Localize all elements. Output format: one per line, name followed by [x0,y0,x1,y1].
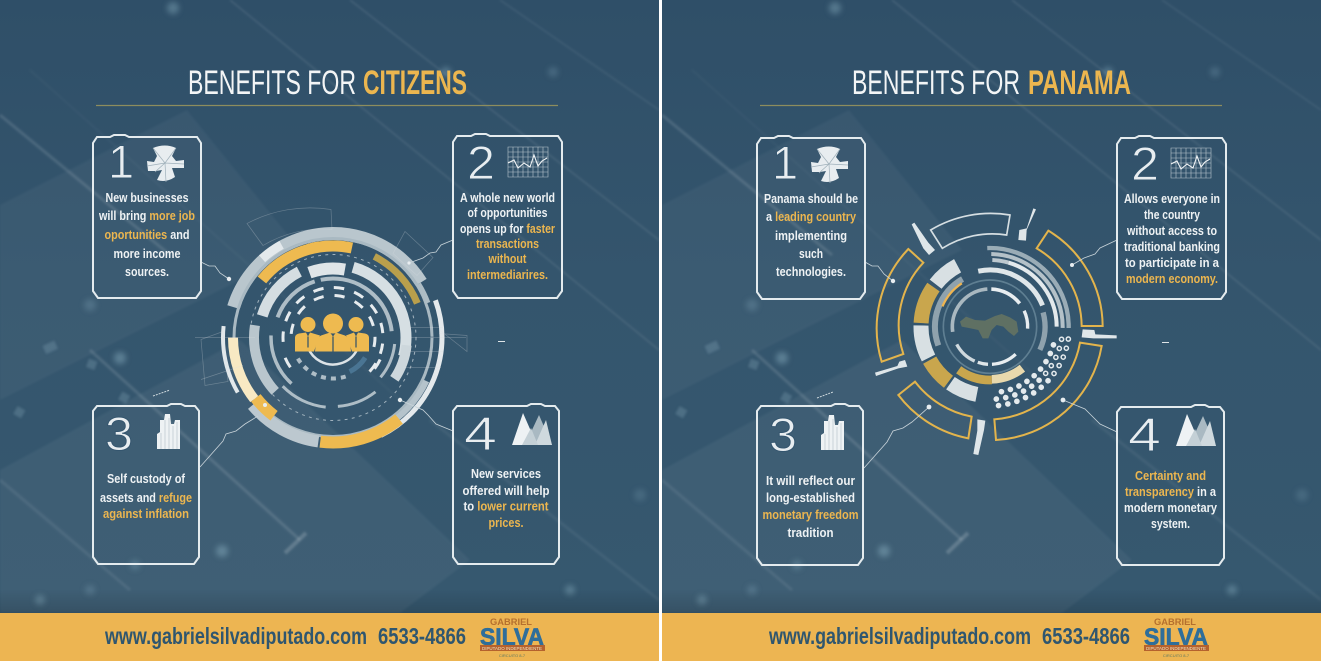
card 2: panama [1117,136,1226,299]
logo: CIRCUITO 8-7 [1163,653,1190,658]
card 4: citizens [453,404,559,564]
circular diagram: panama [875,208,1117,455]
text block: assets and refuge [100,490,192,505]
text block: traditional banking [1124,239,1220,254]
block segments [893,230,1087,424]
text block [460,190,555,282]
text block: to participate in a [1125,255,1220,270]
text block: Allows everyone in [1124,191,1220,206]
connector: card 1 [865,262,895,283]
icon: line chart on grid [508,147,548,177]
ghost outlines [195,208,467,386]
text block: a leading country [766,209,857,224]
number 2: 2 [467,136,495,189]
dot grid [899,236,1081,417]
connector: card 2 [1070,240,1117,267]
gold outlined ring segments [877,231,1103,440]
text block [98,190,195,279]
card 3: panama [757,404,863,565]
logo: DIPUTADO INDEPENDIENTE [1146,646,1206,651]
connector: card 2 [407,240,453,265]
logo [1144,617,1209,658]
circular diagram: citizens [183,187,483,488]
text block: It will reflect our [766,473,855,488]
small mark [817,392,833,398]
text block: monetary freedom [762,507,858,522]
connector: card 4 [398,398,453,431]
small mark [1162,342,1169,344]
number 4: 4 [1128,408,1161,461]
icon: radial pie [811,146,848,183]
text block: intermediarires. [467,267,548,282]
text block: technologies. [776,264,846,279]
card 4: panama [1117,405,1224,565]
icon: line chart on grid [1171,148,1211,178]
text block: more income [114,246,180,261]
footer bar: citizens [0,613,659,661]
text block: to lower current [464,498,549,514]
text block: such [799,246,823,261]
panama map [960,314,1018,338]
small mark [498,340,505,342]
white outlined segment [931,213,1010,248]
logo: CIRCUITO 8-7 [499,653,526,658]
icon: buildings [821,415,844,450]
connector: card 1 [201,262,231,281]
text block: without [488,251,527,266]
logo: SILVA [1144,624,1208,651]
text block: offered will help [462,483,550,498]
text block [1124,191,1220,286]
text block [1124,468,1218,531]
text block: prices. [488,515,524,530]
number 4: 4 [464,407,497,460]
inner rings [916,253,1064,401]
title: benefits for citizens: CITIZENS [363,64,467,102]
number 2: 2 [1131,137,1159,190]
text block: A whole new world [460,190,555,205]
logo: GABRIEL [1154,617,1197,627]
website and phone: 6533-4866 [1042,623,1130,649]
text block: the country [1144,207,1201,222]
icon: three people [295,314,369,352]
connector: card 3 [864,405,931,468]
title: benefits for panama: BENEFITS FOR [852,64,1020,102]
footer bar: panama [662,613,1321,661]
text block: transparency in a [1125,484,1217,499]
icon: mountains [1176,414,1216,446]
card 1: panama [757,136,865,299]
text block: without access to [1126,223,1217,238]
number 1: 1 [108,135,134,188]
text block: oportunities and [104,227,190,242]
text block: against inflation [103,506,189,521]
number 3: 3 [769,408,797,461]
text block: will bring more job [98,208,195,223]
text block: long-established [766,490,855,505]
icon: mountains [512,413,552,445]
text block [100,471,192,521]
logo: SILVA [480,624,544,651]
text block: implementing [775,228,847,243]
logo [480,617,545,658]
text block: Certainty and [1135,468,1206,483]
text block: transactions [476,236,539,251]
text block: tradition [788,525,834,540]
prong ticks [875,208,1117,455]
icon: buildings [157,414,180,449]
connector: card 3 [200,403,267,467]
connector: card 4 [1061,398,1117,432]
text block: New services [471,466,541,481]
title: benefits for panama: PANAMA [1028,64,1131,102]
panel divider [659,0,662,661]
text block [762,473,858,540]
panel: benefits for panama [662,0,1321,661]
number 1: 1 [772,136,798,189]
text block [462,466,550,530]
website and phone: 6533-4866 [378,623,466,649]
text block: Panama should be [764,191,858,206]
card 2: citizens [453,134,562,298]
panel: benefits for citizens [0,0,659,661]
text block: New businesses [106,190,188,205]
logo: GABRIEL [490,617,533,627]
icon: radial pie [147,146,184,182]
logo: DIPUTADO INDEPENDIENTE [482,646,542,651]
number 3: 3 [105,407,133,460]
small mark [153,390,170,396]
card 1: citizens [93,135,201,298]
text block: of opportunities [468,205,548,220]
text block: system. [1151,516,1190,531]
text block: modern economy. [1126,271,1218,286]
text block: sources. [125,264,169,279]
website and phone: www.gabrielsilvadiputado.com [768,623,1031,649]
card 3: citizens [93,404,199,564]
text block: modern monetary [1124,500,1218,515]
triple arcs [908,244,1072,409]
text block: opens up for faster [460,221,555,236]
title: benefits for citizens: BENEFITS FOR [188,64,356,102]
website and phone: www.gabrielsilvadiputado.com [104,623,367,649]
text block: Self custody of [107,471,186,486]
text block [764,191,858,279]
